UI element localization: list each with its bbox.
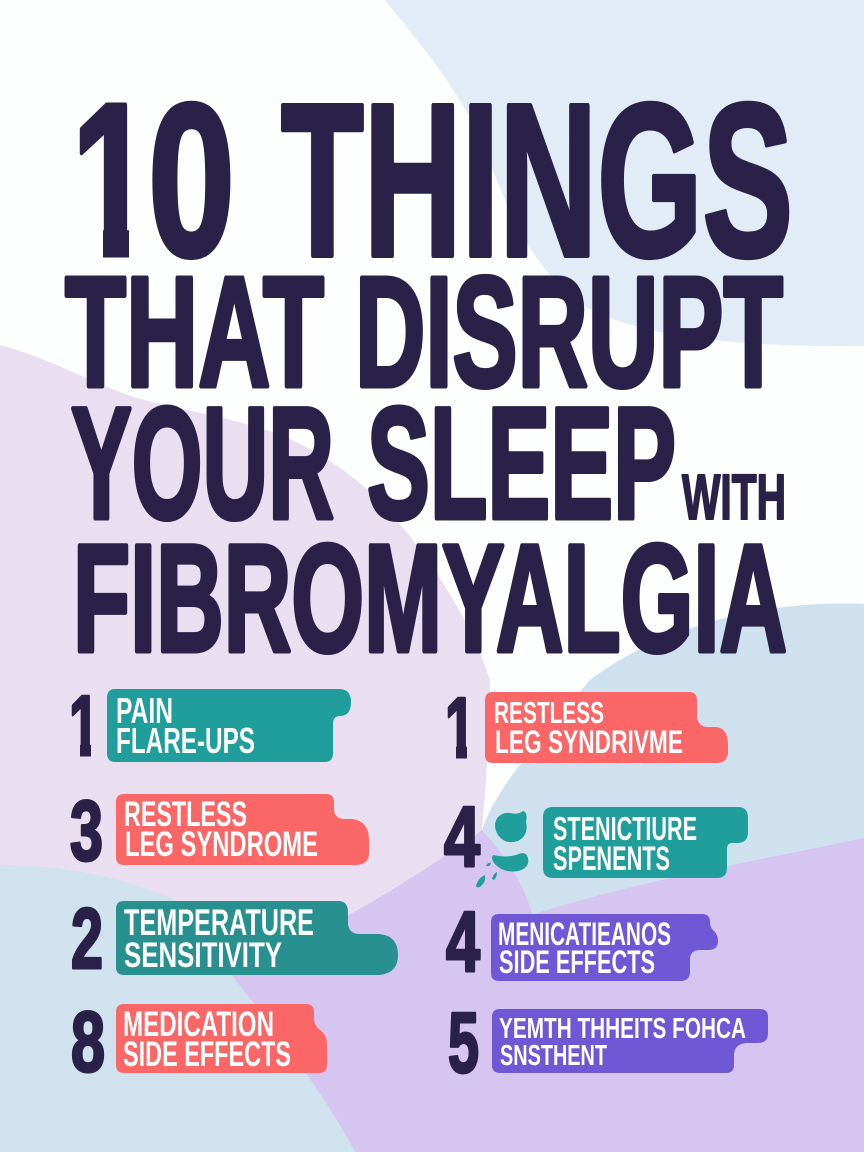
number 3: 3: [70, 784, 103, 879]
title: [64, 100, 790, 655]
label: leg syndrome: LEG SYNDROME: [125, 825, 318, 864]
item: 2 temperature sensitivity: [71, 892, 398, 987]
label: temperature: TEMPERATURE: [124, 902, 314, 943]
label: stenictiure: STENICTIURE: [553, 810, 697, 847]
item: 8 medication side effects: [71, 995, 327, 1090]
number 1 right: 1: [445, 681, 475, 776]
label: side effects: SIDE EFFECTS: [499, 944, 655, 980]
label: flare-ups: FLARE-UPS: [116, 720, 255, 761]
number 1: 1: [69, 679, 99, 774]
badge: temperature sensitivity: [116, 901, 398, 975]
title word: WITH: WITH: [682, 461, 786, 533]
item: 1 pain flare-ups: [72, 689, 351, 762]
number 5: 5: [448, 996, 479, 1091]
label: sensitivity: SENSITIVITY: [124, 936, 282, 975]
badge: medication side effects: [116, 1004, 327, 1073]
title glyph: 0: 0: [148, 60, 235, 302]
item: 4 stenictiure spenents: [444, 790, 748, 888]
label: menicatieanos: MENICATIEANOS: [498, 916, 671, 952]
label: restless: RESTLESS: [124, 795, 247, 834]
label: spenents: SPENENTS: [553, 840, 670, 878]
title word: THAT: THAT: [65, 245, 324, 420]
label: snsthent: SNSTHENT: [500, 1040, 607, 1072]
number 4: 4: [444, 790, 480, 885]
label: leg syndrivme: LEG SYNDRIVME: [495, 724, 683, 760]
item: 5 yemth thheits fohca snsthent: [448, 996, 768, 1091]
label: yemth thheits fohca: YEMTH THHEITS FOHCA: [499, 1013, 746, 1045]
label: side effects: SIDE EFFECTS: [123, 1035, 291, 1074]
badge: stenictiure spenents: [543, 807, 748, 878]
item: 4 menicatieanos side effects: [446, 895, 718, 990]
title word: YOUR: YOUR: [71, 374, 334, 552]
badge: restless leg syndrime: [485, 692, 728, 763]
badge: yemth thheits fohca snsthent: [492, 1009, 768, 1073]
number 8: 8: [71, 995, 105, 1090]
label: restless: RESTLESS: [494, 695, 604, 730]
item: 3 restless leg syndrome: [70, 784, 369, 879]
title glyph: 1: 1: [72, 59, 152, 302]
label: medication: MEDICATION: [123, 1005, 274, 1044]
number 2: 2: [71, 892, 103, 987]
badge: menicatieanos side effects: [491, 914, 718, 981]
icon: teal blobs and drops: [476, 811, 528, 888]
badge: pain flare-ups: [107, 689, 351, 762]
badge: restless leg syndrome: [116, 794, 369, 865]
number 4 lower: 4: [446, 895, 480, 990]
item: 1 restless leg syndrime: [448, 692, 728, 763]
label: pain: PAIN: [116, 690, 173, 731]
